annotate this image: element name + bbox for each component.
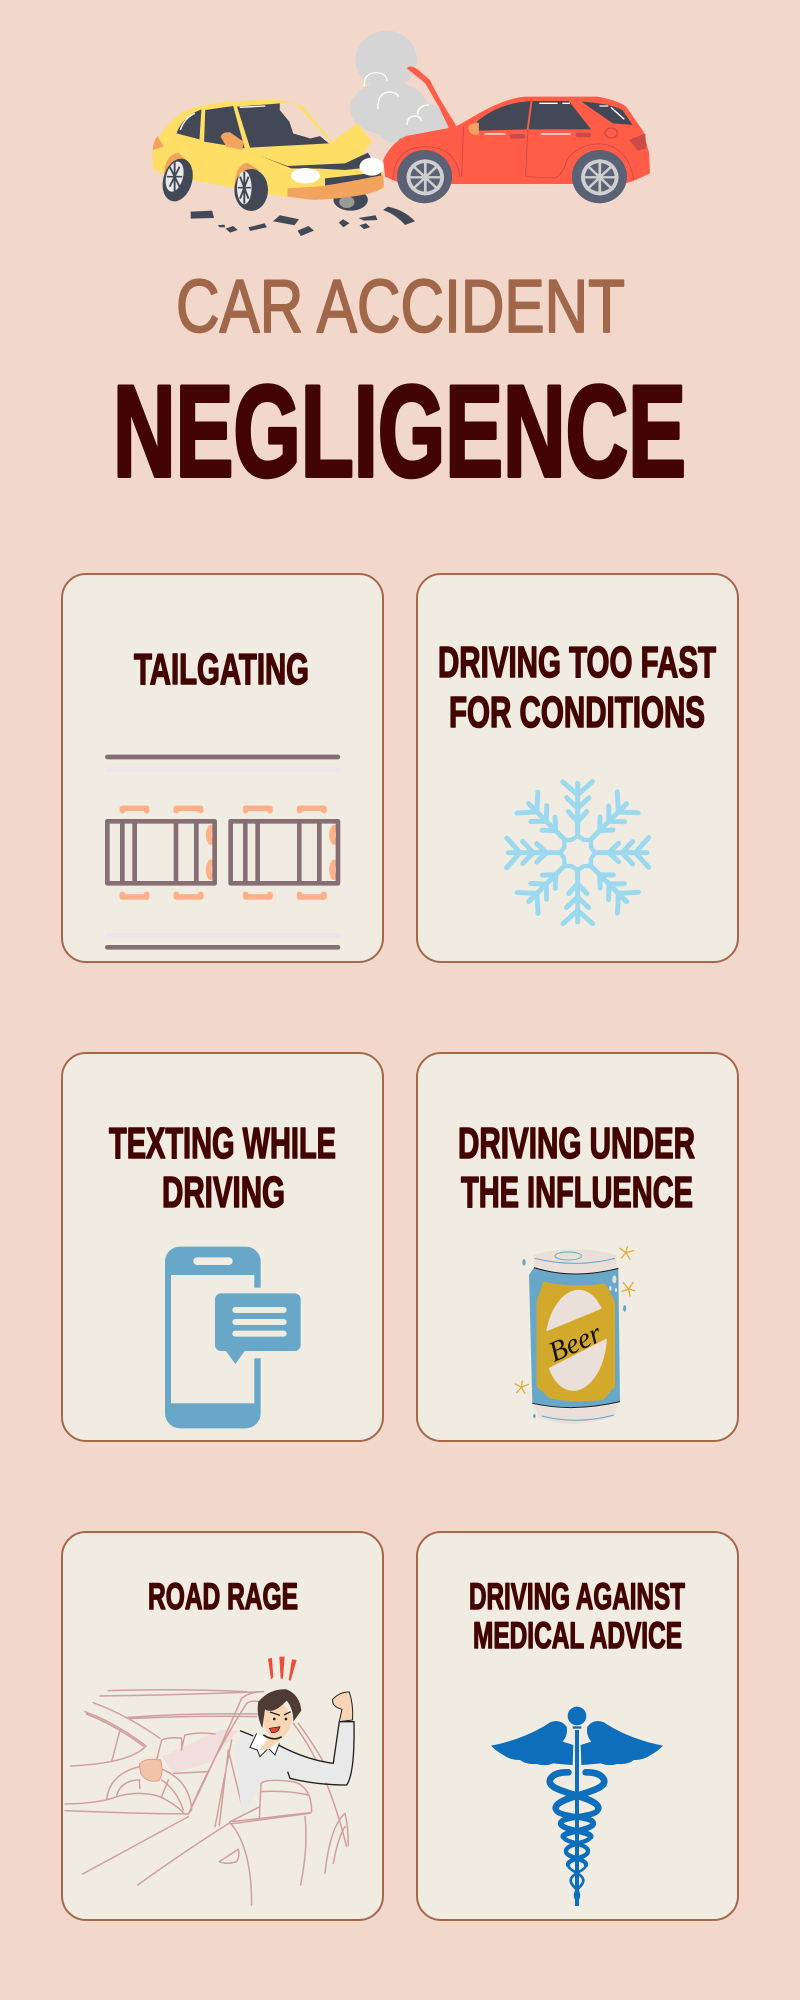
heading: DRIVING AGAINST	[469, 1576, 685, 1617]
head	[260, 1700, 292, 1750]
card background	[417, 1532, 738, 1920]
mirror	[230, 1780, 312, 1824]
shirt	[235, 1722, 354, 1813]
panel: driving too fast for conditions	[417, 574, 738, 962]
icon: beer can	[515, 1247, 635, 1424]
card background	[62, 574, 383, 962]
panel: texting while driving: DRIVING	[162, 1168, 285, 1217]
heading: DRIVING UNDER	[458, 1119, 695, 1168]
icon: caduceus	[491, 1707, 663, 1906]
icon: two cars following closely	[107, 757, 338, 947]
red car	[383, 67, 650, 203]
raised fist	[333, 1692, 353, 1722]
panel: driving under the influence	[417, 1053, 738, 1441]
steering hand	[139, 1759, 162, 1781]
smoke cloud	[350, 31, 449, 144]
illustration: angry driver	[65, 1657, 354, 1905]
exclamation marks	[268, 1657, 297, 1681]
debris	[191, 207, 415, 236]
heading: ROAD RAGE	[148, 1576, 298, 1617]
collar	[250, 1733, 279, 1757]
card background	[417, 574, 738, 962]
panel: tailgating	[62, 574, 383, 962]
heading: TEXTING WHILE	[109, 1119, 336, 1168]
title: car accident: CAR ACCIDENT	[176, 264, 625, 348]
card background	[417, 1053, 738, 1441]
panel: driving against medical advice: MEDICAL ADVICE	[473, 1615, 682, 1656]
panel: road rage	[62, 1532, 383, 1920]
yellow car	[152, 100, 384, 211]
panel: driving against medical advice	[417, 1532, 738, 1920]
panel: texting while driving	[62, 1053, 383, 1441]
icon: beer can: Beer	[544, 1317, 607, 1368]
illustration: car crash	[152, 31, 650, 236]
icon: phone with message	[165, 1247, 301, 1428]
card background	[62, 1053, 383, 1441]
passenger arm	[162, 1730, 238, 1773]
card background	[62, 1532, 383, 1920]
icon: snowflake	[507, 782, 649, 924]
heading: TAILGATING	[134, 645, 309, 694]
